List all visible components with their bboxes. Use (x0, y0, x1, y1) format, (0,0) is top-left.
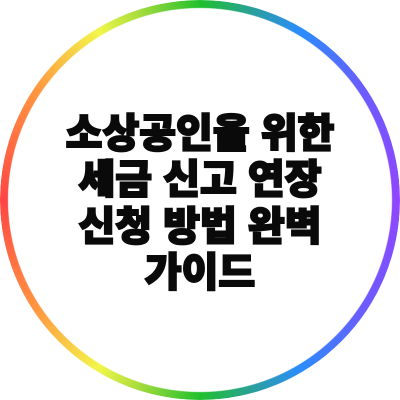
title line 3: 신청 방법 완벽 (78, 205, 322, 249)
title line 1: 소상공인을 위한 (66, 112, 334, 156)
title line 2: 세금 신고 연장 (78, 158, 322, 202)
title line 4: 가이드 (145, 251, 255, 295)
